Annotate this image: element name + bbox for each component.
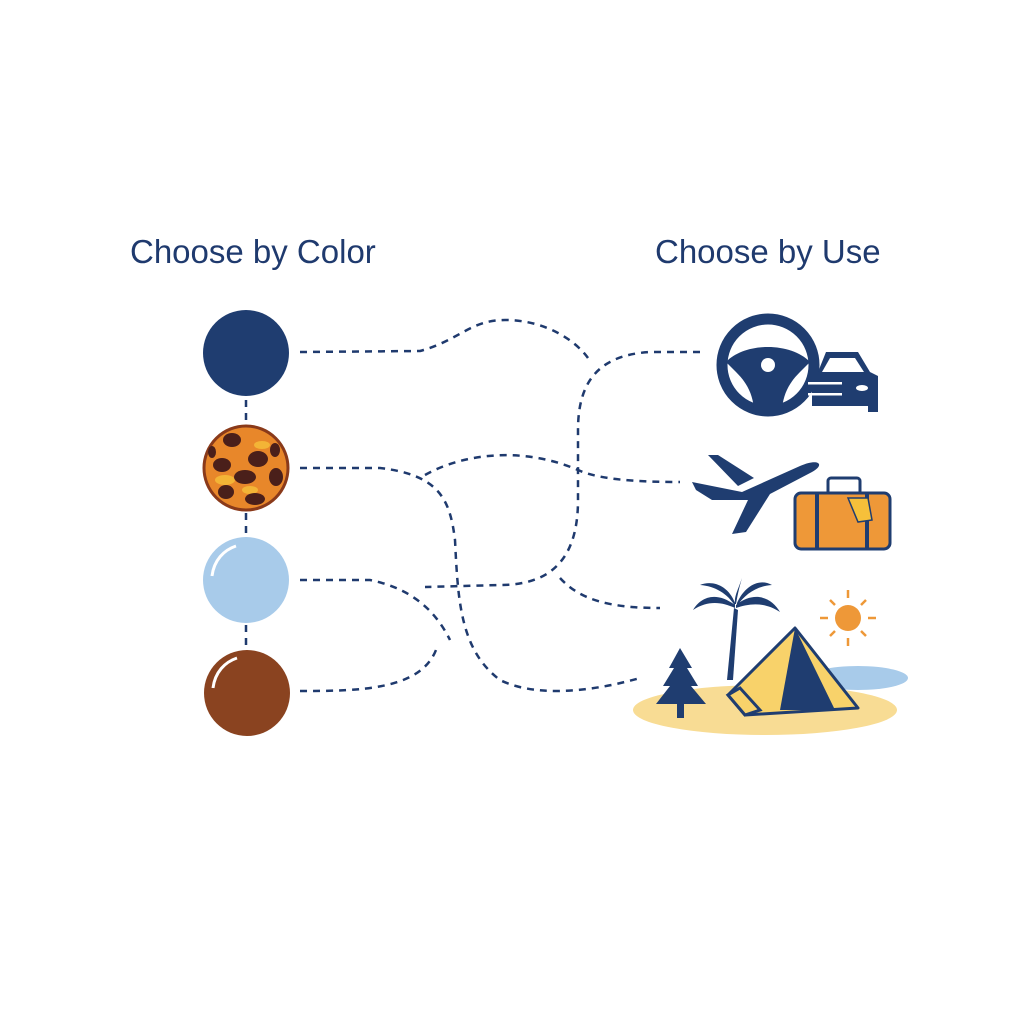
swatch: leopard bbox=[204, 426, 288, 510]
icon: steering wheel and car bbox=[722, 319, 878, 412]
connector lines bbox=[246, 320, 700, 691]
icon: camping beach scene bbox=[633, 578, 908, 735]
icon: suitcase bbox=[795, 478, 890, 549]
swatch: light blue bbox=[203, 537, 289, 623]
icon: airplane bbox=[692, 455, 819, 534]
swatch: navy bbox=[203, 310, 289, 396]
title: choose by use: Choose by Use bbox=[655, 233, 881, 270]
swatch: brown bbox=[204, 650, 290, 736]
title: choose by color: Choose by Color bbox=[130, 233, 376, 270]
